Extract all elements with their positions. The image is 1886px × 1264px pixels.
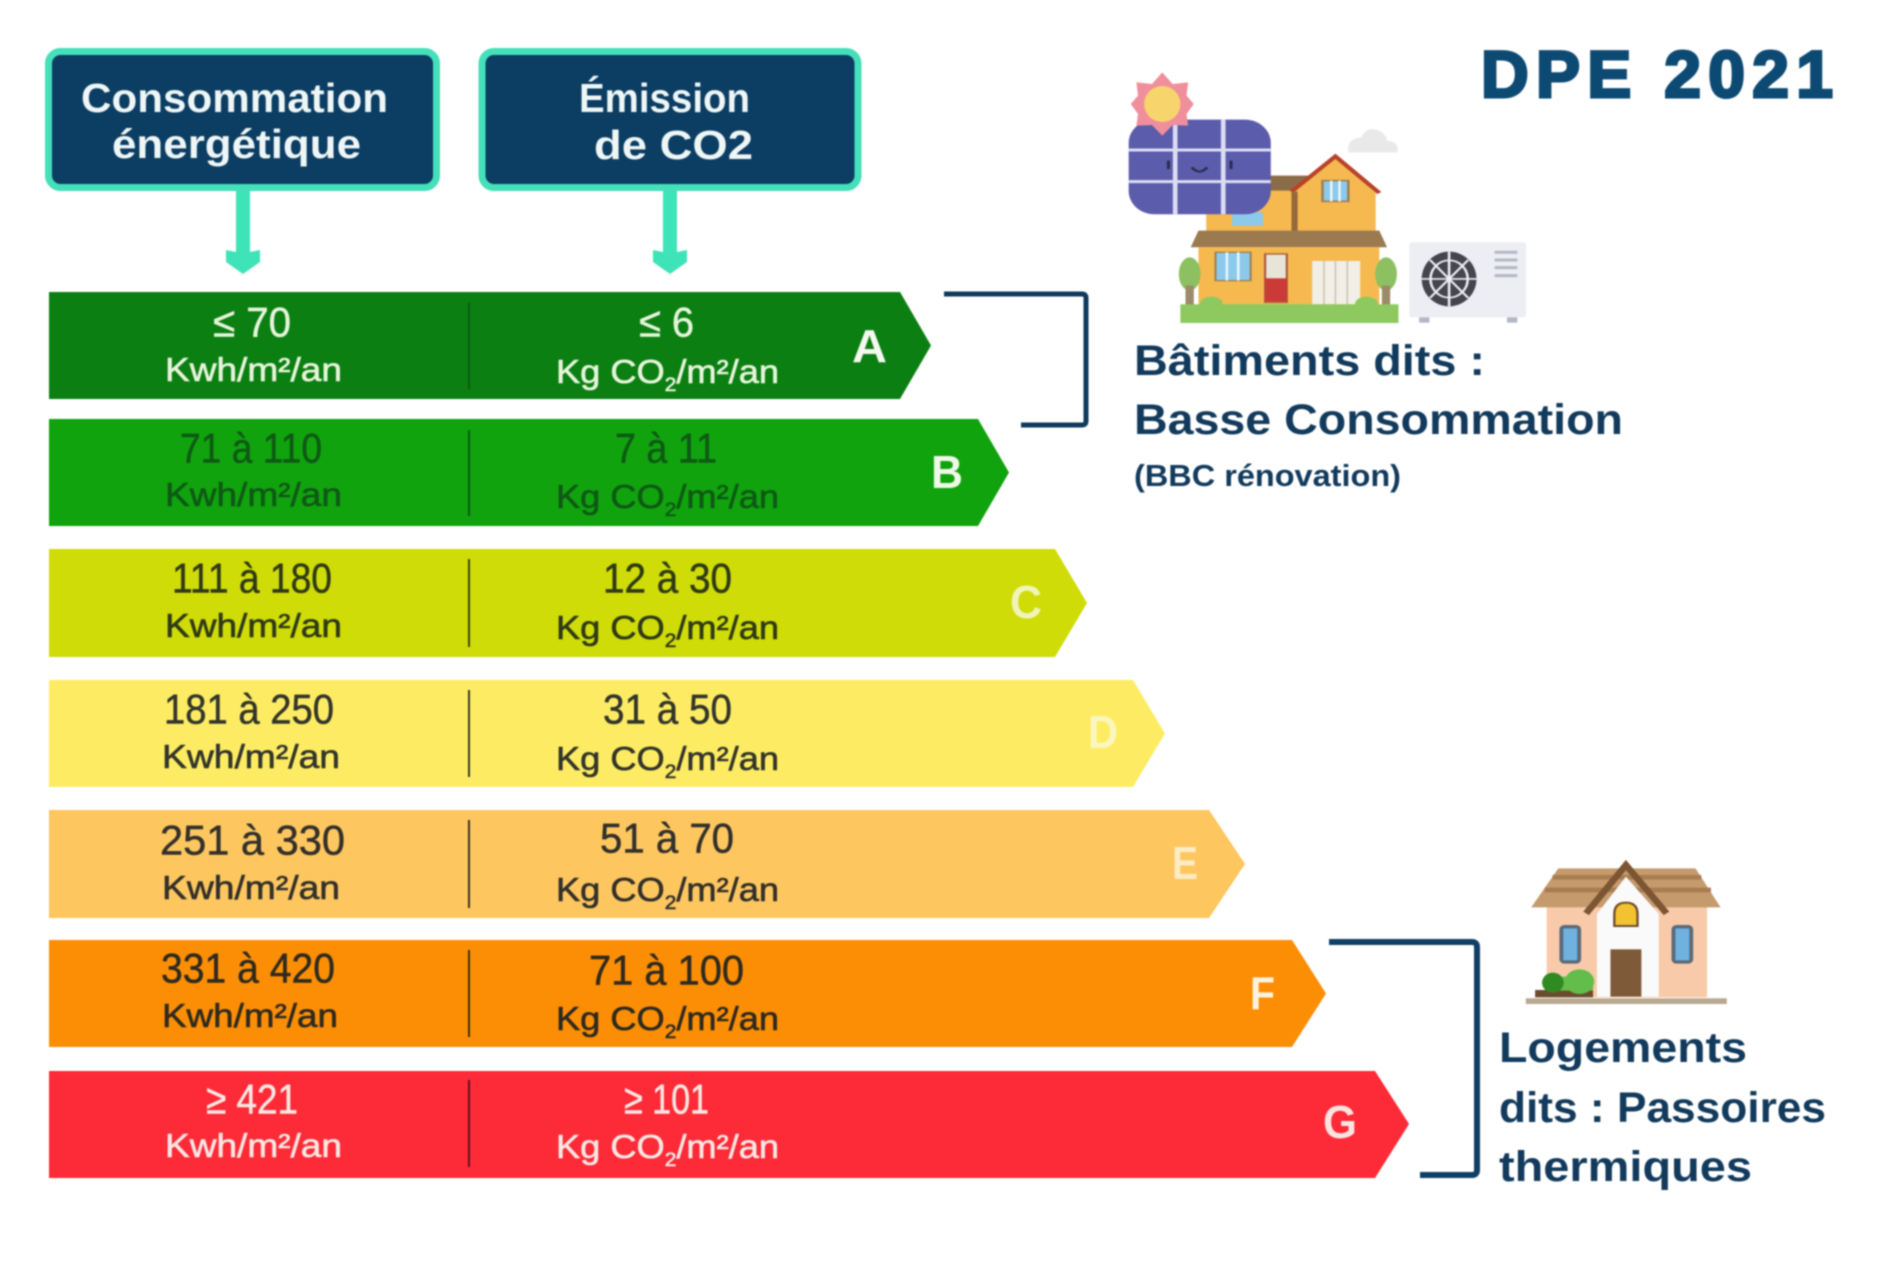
icon: energy-efficient house with solar panel and heat pump — [1129, 72, 1526, 323]
bar B: 71 à 110 — [180, 424, 322, 472]
bar C: 111 à 180 — [172, 554, 332, 602]
bar B: /m²/an — [676, 478, 779, 515]
bar F — [49, 940, 1326, 1047]
label: Logements passoires thermiques — [1499, 1024, 1826, 1191]
bar A: /m²/an — [676, 353, 779, 390]
bar A: Kg CO — [556, 353, 655, 390]
label: Bâtiments basse consommation: Bâtiments dits : — [1134, 337, 1485, 385]
bar G — [49, 1071, 1409, 1178]
label: Logements passoires thermiques: dits : Passoires — [1499, 1084, 1826, 1132]
bar C: 2 — [665, 631, 676, 652]
bar D: Kg CO — [556, 740, 655, 777]
bar C: Kwh/m²/an — [165, 607, 342, 644]
label: Bâtiments basse consommation: Basse Consommation — [1134, 396, 1623, 444]
bar D: 31 à 50 — [603, 686, 732, 732]
bar A: ≤ 70 — [213, 298, 291, 346]
heading box: Consommation énergétique: énergétique — [112, 121, 361, 167]
bar F: F — [1250, 967, 1275, 1019]
bar C — [49, 549, 1087, 657]
bar F: Kg CO — [556, 1000, 655, 1037]
bar D: D — [1088, 706, 1118, 758]
bar A: A — [852, 320, 887, 372]
bar D — [49, 680, 1165, 787]
heading box: Consommation énergétique — [48, 52, 436, 188]
solar panel — [1129, 120, 1271, 214]
bar D: 181 à 250 — [164, 686, 334, 732]
bar C: Kg CO — [556, 609, 655, 646]
bar C: /m²/an — [676, 609, 779, 646]
bar G: Kwh/m²/an — [165, 1127, 342, 1164]
bar E: 51 à 70 — [600, 814, 734, 862]
bar D: Kwh/m²/an — [162, 738, 340, 775]
label: Logements passoires thermiques: Logements — [1499, 1024, 1747, 1072]
bar E: Kg CO — [556, 871, 655, 908]
bar A: ≤ 6 — [639, 298, 694, 346]
bar G: Kg CO — [556, 1128, 655, 1165]
icon: poorly insulated house — [1526, 865, 1727, 1004]
bar F: Kwh/m²/an — [162, 997, 338, 1034]
house — [1179, 156, 1398, 323]
arrow: emission to scale — [653, 190, 687, 274]
cloud — [1348, 129, 1398, 152]
bar B: B — [931, 446, 963, 498]
label: Bâtiments basse consommation — [1134, 337, 1623, 493]
bar E: /m²/an — [676, 871, 779, 908]
heading box: Consommation énergétique: Consommation — [81, 75, 388, 121]
arrow: consommation to scale — [226, 190, 260, 274]
bar G: /m²/an — [676, 1128, 779, 1165]
bar C: C — [1010, 576, 1042, 628]
heading box: Émission de CO2: de CO2 — [594, 122, 753, 168]
bar G: G — [1323, 1096, 1357, 1148]
bracket: classes F and G — [1329, 942, 1477, 1175]
heading box: Émission de CO2 — [482, 52, 858, 188]
bar B: 2 — [665, 500, 676, 521]
bar E: 2 — [665, 893, 676, 914]
bar C: 12 à 30 — [603, 554, 732, 602]
bar G: ≥ 101 — [624, 1076, 709, 1122]
bar F: 71 à 100 — [589, 946, 744, 994]
bar A: 2 — [665, 375, 676, 396]
bar B — [49, 419, 1009, 526]
heat pump — [1409, 242, 1526, 323]
bar E: E — [1172, 837, 1198, 889]
bar G: ≥ 421 — [206, 1076, 298, 1122]
label: Bâtiments basse consommation: (BBC rénovation) — [1134, 458, 1401, 493]
title: DPE 2021 — [1481, 37, 1833, 111]
bar B: Kg CO — [556, 478, 655, 515]
heading box: Émission de CO2: Émission — [579, 75, 750, 121]
bar B: Kwh/m²/an — [165, 476, 342, 513]
bar B: 7 à 11 — [615, 424, 717, 472]
bar A — [49, 292, 931, 399]
bar G: 2 — [665, 1150, 676, 1171]
label: Logements passoires thermiques: thermiques — [1499, 1143, 1752, 1191]
bar A: Kwh/m²/an — [165, 351, 342, 388]
bar E: 251 à 330 — [160, 816, 345, 864]
bar F: 331 à 420 — [161, 944, 335, 992]
sun — [1131, 72, 1194, 136]
bar F: /m²/an — [676, 1000, 779, 1037]
bar E — [49, 810, 1245, 918]
bar D: 2 — [665, 762, 676, 783]
bar F: 2 — [665, 1022, 676, 1043]
bar D: /m²/an — [676, 740, 779, 777]
bar E: Kwh/m²/an — [162, 869, 340, 906]
bracket: classes A and B — [944, 294, 1086, 425]
